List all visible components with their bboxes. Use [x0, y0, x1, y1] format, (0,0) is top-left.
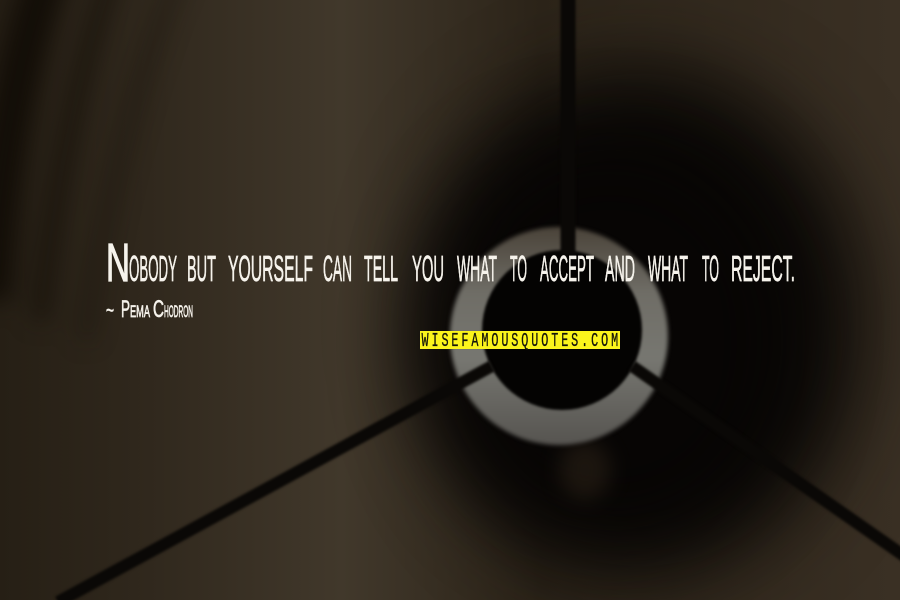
quote text: BUT [187, 248, 216, 289]
author attribution: P [121, 296, 130, 323]
quote text: CAN [323, 248, 352, 289]
quote text [106, 233, 795, 293]
quote poster: REJECT. [731, 248, 795, 289]
watermark badge: WISEFAMOUSQUOTES.COM [422, 330, 621, 352]
quote text: TELL [364, 248, 398, 289]
quote text: YOU [412, 248, 444, 289]
quote text: TO [702, 248, 719, 289]
quote poster: HODRON [164, 302, 193, 321]
author attribution: C [153, 296, 164, 323]
light ring with central hub [450, 227, 668, 445]
quote text: N [106, 233, 130, 293]
quote text: ACCEPT [540, 248, 594, 289]
quote text: TO [510, 248, 527, 289]
author attribution: EMA [130, 302, 150, 321]
quote text: AND [605, 248, 635, 289]
quote text: WHAT [648, 248, 688, 289]
quote text: OBODY [129, 248, 177, 289]
quote text: WHAT [457, 248, 497, 289]
author attribution [106, 296, 193, 323]
author attribution: ~ [106, 300, 114, 322]
quote text: YOURSELF [228, 248, 313, 289]
